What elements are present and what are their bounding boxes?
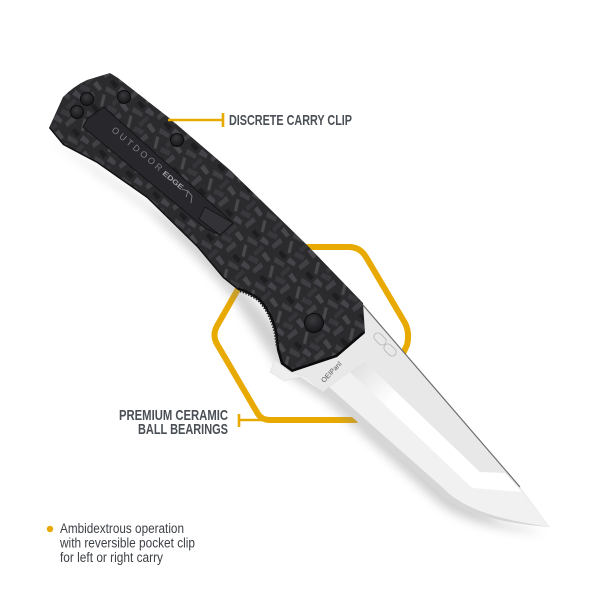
- knife shadow: [46, 135, 545, 533]
- blade steel text: OEIPanl: [320, 361, 344, 384]
- handle: [49, 73, 365, 372]
- label: discrete carry clip: DISCRETE CARRY CLIP: [229, 112, 352, 129]
- bullet text: [59, 521, 195, 565]
- blade stamps: [372, 331, 398, 358]
- bullet text: Ambidextrous operation: [60, 521, 184, 536]
- white fuller band: [350, 362, 522, 492]
- knife: [49, 73, 550, 527]
- blade: [270, 305, 550, 527]
- label: ceramic ball bearings: PREMIUM CERAMIC: [119, 407, 228, 424]
- handle lower edge: [49, 128, 238, 290]
- pocket clip: [83, 107, 233, 235]
- bullet text: with reversible pocket clip: [59, 536, 195, 550]
- leader: clip: [168, 113, 223, 127]
- spine line: [363, 305, 520, 487]
- leader: bearings: [239, 414, 262, 427]
- jimping: [240, 291, 277, 346]
- tang and blade body: [270, 305, 550, 527]
- logo peaks: [182, 189, 192, 203]
- lower blade bevel: [326, 372, 550, 527]
- label: ceramic ball bearings: [119, 407, 228, 438]
- clip logo: OUTDOOR: [110, 125, 165, 173]
- edge highlight: [323, 387, 550, 527]
- rivets: [70, 90, 324, 332]
- bullet dot: [47, 526, 53, 532]
- pocket clip: EDGE: [161, 170, 185, 192]
- hexagon callout outline: [214, 247, 408, 420]
- bullet text: for left or right carry: [60, 550, 163, 565]
- label: ceramic ball bearings: BALL BEARINGS: [138, 421, 228, 438]
